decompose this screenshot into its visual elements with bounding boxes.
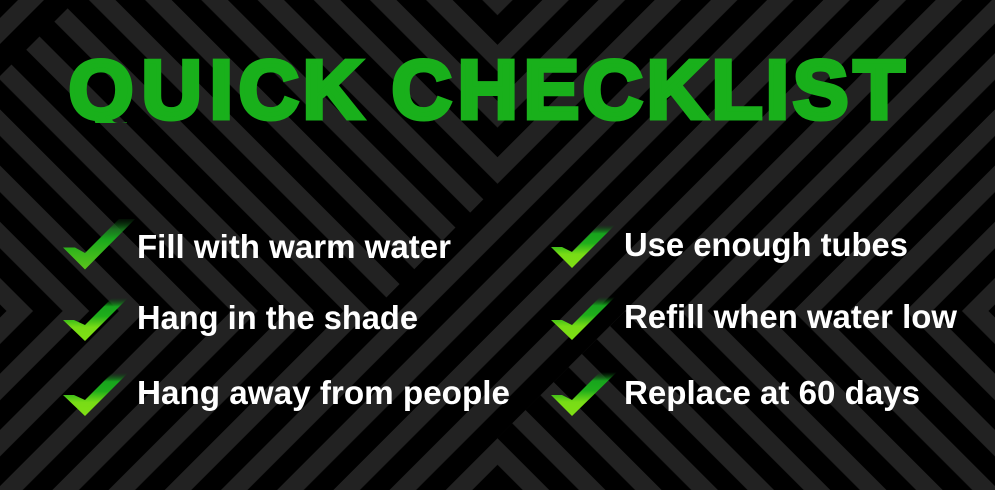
checklist item: hang in the shade xyxy=(63,298,418,341)
icon: check mark 6 xyxy=(551,372,617,416)
label 6: Replace at 60 days xyxy=(624,374,920,411)
label 1: Fill with warm water xyxy=(137,228,451,265)
label 3: Hang away from people xyxy=(137,374,510,411)
checklist item: fill with warm water xyxy=(63,219,451,270)
icon: check mark 4 xyxy=(551,225,615,268)
label 4: Use enough tubes xyxy=(624,226,908,263)
checklist item: hang away from people xyxy=(63,373,510,416)
checklist item: use enough tubes xyxy=(551,225,908,268)
checklist item: refill when water low xyxy=(551,297,957,340)
label 5: Refill when water low xyxy=(624,298,957,335)
icon: check mark 5 xyxy=(551,297,615,340)
icon: check mark 3 xyxy=(63,373,128,416)
icon: check mark 2 xyxy=(63,298,128,341)
checklist item: replace at 60 days xyxy=(551,372,920,416)
label 2: Hang in the shade xyxy=(137,299,418,336)
icon: check mark 1 xyxy=(63,219,135,270)
title: QUICK CHECKLIST xyxy=(69,43,905,136)
